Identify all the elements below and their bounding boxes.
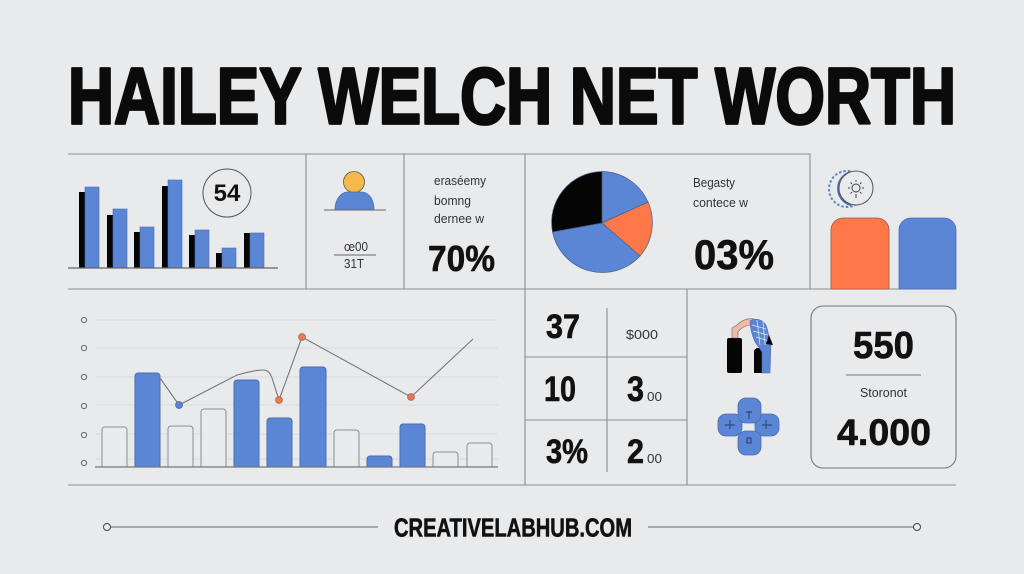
icon: sun badge — [829, 171, 873, 207]
icon: person — [324, 172, 386, 210]
bar: blue — [899, 218, 956, 289]
footer website: CREATIVELABHUB.COM — [394, 512, 632, 542]
cell: 2 00: 00 — [647, 452, 662, 466]
icon: clover pad — [718, 398, 779, 455]
panel: person — [324, 172, 386, 271]
panel: number table — [525, 308, 687, 472]
cell: 3%: 3% — [546, 433, 588, 471]
panel: icon and rounded bars — [829, 171, 956, 289]
fraction figures — [334, 240, 376, 271]
caption: dernee w — [434, 212, 485, 226]
panel: combined bar and line chart — [81, 317, 498, 467]
caption: bomng — [434, 194, 471, 208]
bar: orange — [831, 218, 889, 289]
pie chart — [552, 172, 652, 273]
cell: 3 00 — [627, 370, 662, 409]
stat: 03%: 03% — [694, 231, 774, 278]
caption: eraséemy — [434, 174, 487, 188]
footer — [104, 512, 920, 542]
panel: 70% stat — [428, 174, 495, 279]
cell: 3 00: 00 — [647, 390, 662, 404]
stat: 550: 550 — [853, 325, 914, 367]
cell: 10: 10 — [544, 370, 576, 409]
panel: pie chart — [552, 172, 774, 278]
caption: Begasty — [693, 176, 736, 190]
panel: icons — [718, 319, 779, 455]
stat: 70%: 70% — [428, 238, 495, 279]
icon: arch figure — [727, 319, 773, 373]
column chart — [95, 367, 498, 467]
bar chart — [68, 180, 278, 268]
caption: contece w — [693, 196, 749, 210]
line series — [160, 334, 473, 408]
panel: grouped bar chart — [68, 169, 278, 268]
caption — [434, 174, 487, 226]
card label: Storonot — [860, 386, 908, 400]
caption — [693, 176, 749, 210]
fraction figures: œ00 — [344, 240, 368, 254]
badge: 54: 54 — [214, 180, 241, 207]
cell: 37: 37 — [546, 308, 580, 346]
cell: $000: $000 — [626, 328, 658, 342]
axis markers — [81, 317, 87, 466]
badge: 54 — [203, 169, 251, 217]
cell: 2 00 — [627, 433, 662, 471]
panel: summary card — [811, 306, 956, 468]
cell: 3 00: 3 — [627, 370, 644, 409]
fraction figures: 31T — [344, 257, 364, 271]
cell: 2 00: 2 — [627, 433, 644, 471]
stat: 4.000: 4.000 — [837, 412, 931, 453]
